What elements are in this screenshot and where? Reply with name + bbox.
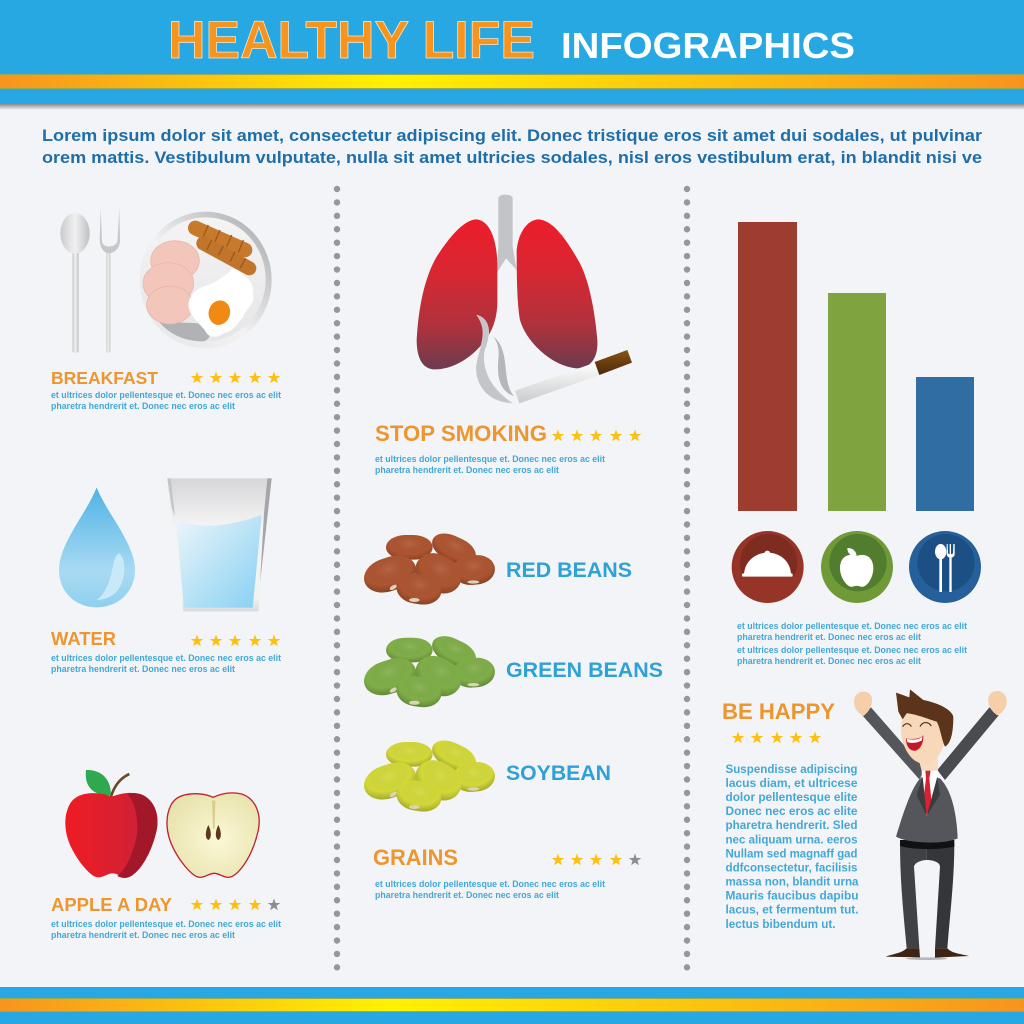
text: water <box>51 653 281 674</box>
text: apple a day: et ultrices dolor pellentesque et. Donec nec eros ac elit <box>51 919 281 929</box>
label: red beans: RED BEANS <box>506 558 632 582</box>
text: stop smoking: et ultrices dolor pellentesque et. Donec nec eros ac elit <box>375 454 605 464</box>
text: chart notes <box>737 621 967 666</box>
icon: lungs and cigarette <box>417 195 632 403</box>
illustration: happy businessman <box>854 689 1007 960</box>
title: HEALTHY LIFE <box>168 11 535 70</box>
icon: green beans <box>359 631 496 710</box>
text: be happy paragraph <box>726 764 859 931</box>
panel: water <box>51 478 281 674</box>
text: be happy paragraph: Suspendisse adipiscing <box>726 764 858 776</box>
label: green beans: GREEN BEANS <box>506 658 663 682</box>
header banner <box>0 0 1024 110</box>
text: grains: pharetra hendrerit et. Donec nec eros ac elit <box>375 890 559 900</box>
text: be happy paragraph: nec aliquam urna. eeros <box>726 834 858 846</box>
panel: stop smoking <box>375 195 641 475</box>
icon: spoon, fork and plate <box>60 208 272 353</box>
heading: water: WATER <box>51 629 116 649</box>
text: stop smoking <box>375 454 605 475</box>
title <box>168 11 855 70</box>
text: be happy paragraph: Donec nec eros ac elite <box>726 806 858 818</box>
text: water: et ultrices dolor pellentesque et. Donec nec eros ac elit <box>51 653 281 663</box>
text: water: pharetra hendrerit et. Donec nec eros ac elit <box>51 664 235 674</box>
text: grains: et ultrices dolor pellentesque et. Donec nec eros ac elit <box>375 879 605 889</box>
panel: breakfast <box>51 208 281 411</box>
footer banner <box>0 987 1024 1024</box>
intro text: orem mattis. Vestibulum vulputate, nulla sit amet ultricies sodales, nisl eros vestibulum erat, in blandit nisi ve <box>42 148 982 167</box>
text: stop smoking: pharetra hendrerit et. Donec nec eros ac elit <box>375 465 559 475</box>
text: be happy paragraph: Mauris faucibus dapibu <box>726 890 858 902</box>
text: chart notes: et ultrices dolor pellentesque et. Donec nec eros ac elit <box>737 621 967 631</box>
heading: grains: GRAINS <box>373 845 458 870</box>
text: breakfast <box>51 390 281 411</box>
text: chart notes: pharetra hendrerit et. Donec nec eros ac elit <box>737 632 921 642</box>
rating stars: water <box>191 634 280 646</box>
heading: stop smoking: STOP SMOKING <box>375 421 547 446</box>
rating stars: be happy <box>732 732 821 743</box>
text: breakfast: et ultrices dolor pellentesque et. Donec nec eros ac elit <box>51 390 281 400</box>
text: apple a day <box>51 919 281 940</box>
text: be happy paragraph: lectus bibendum ut. <box>726 919 836 931</box>
text: be happy paragraph: ddfconsectetur, facilisis <box>726 862 858 874</box>
icon: food cloche <box>732 531 804 603</box>
rating stars: apple a day <box>191 898 280 910</box>
heading: breakfast: BREAKFAST <box>51 368 158 388</box>
text: grains <box>375 879 605 900</box>
text: chart notes: pharetra hendrerit et. Donec nec eros ac elit <box>737 656 921 666</box>
label: soybean: SOYBEAN <box>506 761 611 785</box>
icon: red beans <box>359 528 496 607</box>
icon: water drop and glass <box>59 478 272 611</box>
intro text <box>42 126 982 167</box>
text: breakfast: pharetra hendrerit et. Donec nec eros ac elit <box>51 401 235 411</box>
text: be happy paragraph: massa non, blandit urna <box>726 876 859 888</box>
icon: soybeans <box>359 735 496 814</box>
text: be happy paragraph: Nullam sed magnaff gad <box>726 848 858 860</box>
heading: apple a day: APPLE A DAY <box>51 894 173 915</box>
panel: apple a day <box>51 770 281 940</box>
chart icons <box>732 531 981 603</box>
icon: spoon and fork <box>909 531 981 603</box>
text: be happy paragraph: lacus, et fermentum tut. <box>726 904 858 916</box>
icon: whole apple and halved apple <box>65 770 259 878</box>
bar chart <box>738 222 974 511</box>
intro text: Lorem ipsum dolor sit amet, consectetur adipiscing elit. Donec tristique eros sit amet dui sodales, ut pulvinar <box>42 126 982 145</box>
text: be happy paragraph: dolor pellentesque elite <box>726 792 858 804</box>
title: INFOGRAPHICS <box>561 25 855 66</box>
rating stars: breakfast <box>191 372 280 383</box>
panel: be happy <box>722 689 1007 960</box>
icon: apple <box>821 531 893 603</box>
text: apple a day: pharetra hendrerit et. Donec nec eros ac elit <box>51 930 235 940</box>
text: chart notes: et ultrices dolor pellentesque et. Donec nec eros ac elit <box>737 645 967 655</box>
panel: grains <box>359 528 663 900</box>
text: be happy paragraph: pharetra hendrerit. Sled <box>726 820 858 832</box>
heading: be happy: BE HAPPY <box>722 699 835 724</box>
rating stars: grains <box>552 854 641 865</box>
rating stars: stop smoking <box>552 430 641 441</box>
text: be happy paragraph: lacus diam, et ultricese <box>726 778 858 790</box>
